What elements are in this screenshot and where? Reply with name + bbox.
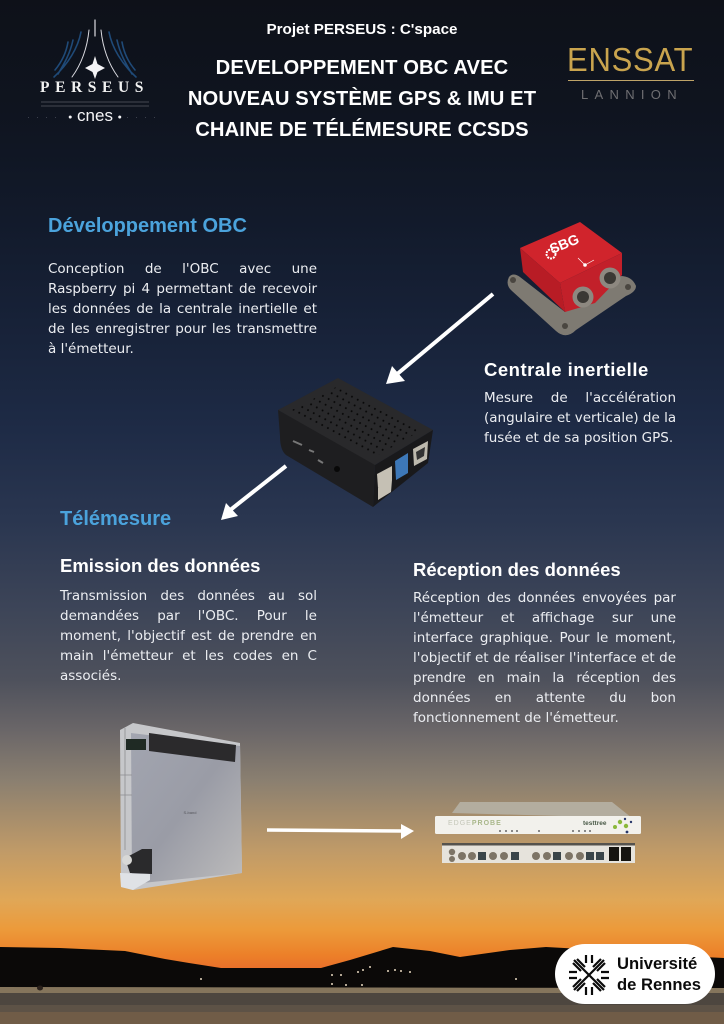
title: CHAINE DE TÉLÉMESURE CCSDS [195,119,529,141]
logo: PERSEUS [27,19,163,125]
text block: Emission description: associés. [60,668,121,684]
icon: transmitter board: S-band [184,810,196,815]
icon: Raspberry Pi case [278,378,433,507]
text block: Réception description: données en attente du bon [413,690,676,706]
logo wordmark [617,954,701,994]
icon: SBG inertial unit: SBG [547,231,581,257]
heading: Développement OBC: Développement OBC [48,215,247,237]
heading: Télémesure: Télémesure [60,508,171,530]
icon: EdgeProbe receiver: EDGEPROBE [448,820,502,827]
text block: OBC description: les données de la centrale inertielle et [48,301,317,317]
logo tagline [41,101,149,108]
logo wordmark: Université [617,954,697,973]
heading: Emission des données: Emission des données [60,555,260,576]
icon: rocket emblem [53,19,137,79]
logo wordmark: ENSSAT [567,41,693,78]
icon: SBG inertial unit [508,222,636,336]
text block: Réception description: interface graphique. Pour le moment, [413,630,676,646]
text block: OBC description [48,261,318,357]
logo: Université de Rennes [555,944,715,1004]
text block: Réception description: Réception des données envoyées par [413,590,676,606]
logo wordmark: de Rennes [617,975,701,994]
text block: OBC description: Conception de l'OBC avec une [48,261,317,277]
text block: Centrale description: Mesure de l'accélération [484,390,676,406]
heading: project name: Projet PERSEUS : C'space [266,21,458,38]
text block: Emission description: Transmission des données au sol [60,588,317,604]
icon: EdgeProbe receiver: testtree [583,820,607,827]
text block: Emission description: moment, l'objectif est de prendre en [60,628,317,644]
text block: OBC description: de les enregistrer pour les transmettre [48,321,317,337]
text block: Emission description: demandées par l'OBC. Pour le [60,608,317,624]
text block: Réception description: l'objectif et de réaliser l'interface et de [413,650,676,666]
logo: cnes: ···· ● cnes ● ···· [27,106,163,125]
heading: Centrale inertielle: Centrale inertielle [484,359,649,380]
icon: Université de Rennes emblem [569,955,609,995]
text block: Réception description [413,590,676,726]
text block: Réception description: prendre en main la réception des [413,670,676,686]
heading: Réception des données: Réception des données [413,559,621,580]
text block: Emission description [60,588,317,684]
arrow: OBC to Télémesure [221,464,288,520]
text block: OBC description: Raspberry pi 4 permettant de recevoir [48,281,317,297]
logo wordmark: PERSEUS [40,79,149,96]
text block: Réception description: l'émetteur et affichage sur une [413,610,676,626]
text block: Centrale description [484,390,676,446]
text block: Emission description: main l'émetteur et les codes en C [60,648,317,664]
text block: Centrale description: (angulaire et verticale) de la [484,410,676,426]
icon: transmitter board [120,723,242,890]
logo rule [568,80,694,81]
text block: Réception description: fonctionnement de l'émetteur. [413,710,619,726]
title: NOUVEAU SYSTÈME GPS & IMU ET [188,88,536,110]
text block: Centrale description: fusée et de sa position GPS. [484,430,673,446]
arrow: SBG to OBC [386,292,494,384]
landscape: hills and water [0,947,724,1024]
title [188,57,536,141]
text block: OBC description: à l'émetteur. [48,341,134,357]
icon: EdgeProbe receiver [435,802,641,863]
logo subtitle: LANNION [581,87,683,102]
title: DEVELOPPEMENT OBC AVEC [216,57,508,79]
arrow: transmitter to receiver [267,824,414,839]
logo: ENSSAT Lannion [567,41,694,102]
